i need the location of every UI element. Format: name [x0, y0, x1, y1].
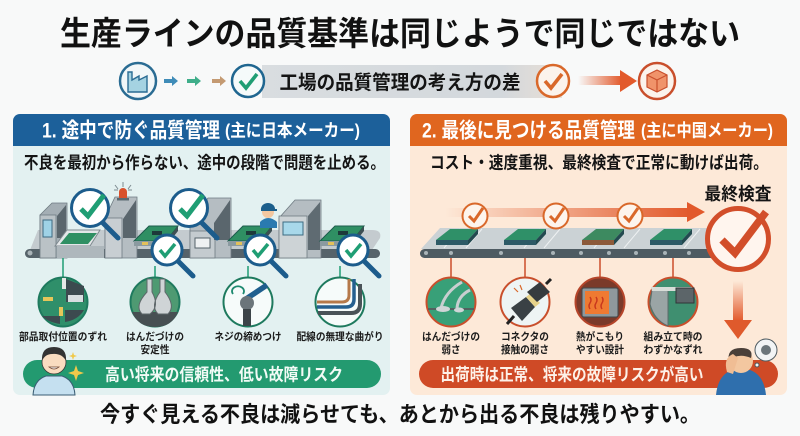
down arrow [724, 281, 752, 339]
detail labels: 熱がこもり [576, 330, 624, 343]
conveyor [420, 228, 740, 258]
panel header: 1. 途中で防ぐ品質管理 [42, 120, 220, 142]
magnifier: large left [72, 190, 118, 238]
detail: connector [500, 278, 551, 326]
product boards [436, 229, 692, 245]
panel subtitle: 不良を最初から作らない、途中の段階で問題を止める。 [24, 154, 385, 172]
magnifier: small 1 [152, 235, 193, 276]
detail: heat design [576, 278, 624, 326]
magnifier checks on the line [72, 190, 379, 276]
result pill [23, 360, 381, 388]
risk pill: 出荷時は正常、将来の故障リスクが高い [440, 364, 704, 384]
detail labels: 弱さ [442, 344, 460, 356]
panel background [13, 114, 390, 395]
connector lines [451, 258, 673, 278]
thought bubble [755, 339, 777, 367]
detail labels: 安定性 [140, 343, 170, 356]
detail labels: やすい設計 [576, 343, 624, 356]
panel header [410, 114, 787, 146]
magnifier: small 3 [338, 235, 379, 276]
happy engineer [33, 347, 75, 395]
detail labels [19, 330, 384, 356]
magnifier: small 2 [245, 235, 286, 276]
title: 生産ラインの品質基準は同じようで同じではない [60, 15, 740, 52]
detail labels: わずかなずれ [644, 343, 703, 356]
arrow to shipping [578, 70, 637, 92]
detail labels: はんだづけの [422, 330, 480, 343]
panel header: (主に日本メーカー) [225, 120, 360, 140]
magnifier: large center [170, 190, 217, 238]
panel header: (主に中国メーカー) [641, 120, 773, 140]
detail labels: コネクタの [501, 331, 549, 343]
detail labels: ネジの締めつけ [214, 330, 282, 343]
icon: orange check [537, 65, 569, 97]
big final check [708, 208, 768, 270]
icon: box [639, 63, 675, 99]
panel: final inspection quality [410, 114, 787, 395]
process banner [120, 63, 675, 99]
worried person [716, 339, 777, 395]
detail labels: 組み立て時の [644, 330, 702, 343]
small process arrows [164, 76, 226, 86]
detail: wire bending [316, 278, 364, 326]
risk pill [419, 360, 778, 388]
icon: green check [232, 65, 264, 97]
connector lines [63, 258, 340, 278]
detail: screw tightening [224, 278, 272, 326]
icon: factory [120, 63, 156, 99]
detail labels: 接触の弱さ [501, 343, 549, 356]
conveyor with machines [25, 182, 380, 258]
circuit boards [134, 226, 364, 246]
detail: part placement [38, 278, 88, 326]
detail labels: はんだづけの [126, 330, 184, 343]
result pill: 高い将来の信頼性、低い故障リスク [105, 364, 343, 384]
detail: weak solder [426, 278, 476, 326]
panel background [410, 114, 787, 395]
banner band [262, 65, 562, 98]
icon: alarm lamp [114, 182, 132, 200]
detail: soldering [130, 278, 180, 327]
machines [40, 197, 321, 258]
panel header [13, 114, 390, 146]
final inspection label: 最終検査 [704, 184, 772, 204]
detail labels: 部品取付位置のずれ [19, 330, 107, 343]
detail labels: 配線の無理な曲がり [296, 330, 384, 343]
detail: assembly misalignment [648, 278, 698, 326]
banner text: 工場の品質管理の考え方の差 [280, 71, 520, 94]
progress arrow [445, 202, 705, 222]
panel header: 2. 最後に見つける品質管理 [422, 120, 635, 142]
bottom summary: 今すぐ見える不良は減らせても、あとから出る不良は残りやすい。 [100, 402, 700, 427]
detail labels [422, 330, 703, 356]
sparkles [68, 352, 84, 381]
small check marks [462, 204, 642, 228]
worker [260, 203, 277, 228]
panel: in-process quality [13, 114, 390, 395]
